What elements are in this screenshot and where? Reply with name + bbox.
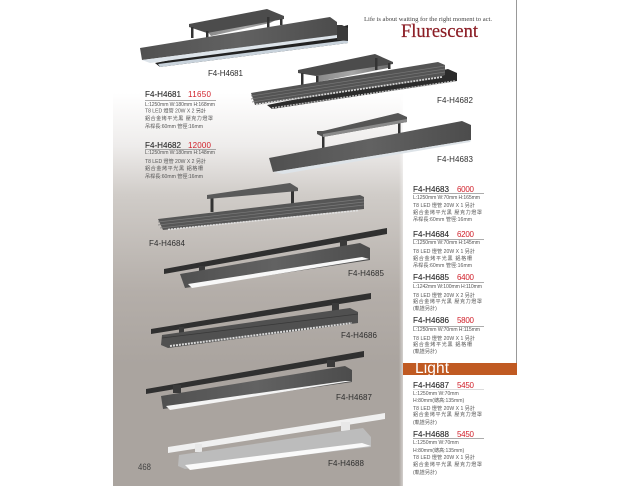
spec: F4-H4681: 吊桿長:60mm 管徑:16mm <box>145 123 203 130</box>
page background panel <box>113 0 403 486</box>
spec: F4-H4683: T8 LED 燈管 20W X 1 另計 <box>413 202 475 209</box>
spec: F4-H4684: L:1250mm W:70mm H:145mm <box>413 240 480 246</box>
spec: F4-H4687: H:80mm(總高:135mm) <box>413 397 465 404</box>
spec: F4-H4682: 12000 <box>188 141 212 150</box>
spec: F4-H4686: 5800 <box>457 316 475 325</box>
spec: F4-H4682 <box>145 141 216 180</box>
lamp F4-H4687 <box>146 351 364 410</box>
spec: F4-H4682: 鋁合金烤平光黑 鋁格柵 <box>145 165 203 172</box>
spec: F4-H4683: 6000 <box>457 185 475 194</box>
spec: F4-H4684: F4-H4684 <box>413 230 449 239</box>
spec: F4-H4688: (軌道另計) <box>413 469 437 476</box>
spec: F4-H4686: 鋁合金烤平光黑 鋁格柵 <box>413 341 472 348</box>
spec: F4-H4688: H:80mm(總高:135mm) <box>413 447 465 454</box>
spec: F4-H4684: 吊桿長:60mm 管徑:16mm <box>413 262 472 269</box>
spec: F4-H4687 <box>413 381 484 426</box>
spec: F4-H4685 <box>413 273 484 312</box>
spec: F4-H4687: T8 LED 燈管 20W X 1 另計 <box>413 405 475 412</box>
spec: F4-H4686: L:1250mm W:70mm H:115mm <box>413 327 480 333</box>
label F4-H4684: F4-H4684 <box>149 239 186 248</box>
spec: F4-H4688: L:1250mm W:70mm <box>413 440 459 446</box>
spec: F4-H4682: 吊桿長:60mm 管徑:16mm <box>145 173 203 180</box>
label F4-H4685: F4-H4685 <box>348 269 385 278</box>
title: Flurescent: Flurescent <box>401 22 479 42</box>
spec: F4-H4687: (軌道另計) <box>413 419 437 426</box>
label F4-H4686: F4-H4686 <box>341 331 378 340</box>
spec: F4-H4686: (軌道另計) <box>413 348 437 355</box>
spec: F4-H4685: 鋁合金烤平光黑 壓克力燈罩 <box>413 298 482 305</box>
spec: F4-H4688: 鋁合金烤平光黑 壓克力燈罩 <box>413 461 482 468</box>
lamp F4-H4684 <box>158 183 364 230</box>
spec: F4-H4684: 鋁合金烤平光黑 鋁格柵 <box>413 255 472 262</box>
lamp F4-H4685 <box>164 228 387 288</box>
section band: Light: Light <box>415 360 450 377</box>
lamp F4-H4682 <box>251 54 457 109</box>
spec: F4-H4685: F4-H4685 <box>413 273 449 282</box>
spec: F4-H4682: F4-H4682 <box>145 141 181 150</box>
spec: F4-H4687: L:1250mm W:70mm <box>413 391 459 397</box>
spec: F4-H4683: 吊桿長:60mm 管徑:16mm <box>413 216 472 223</box>
label F4-H4683: F4-H4683 <box>437 155 474 164</box>
spec: F4-H4686: T8 LED 燈管 20W X 1 另計 <box>413 335 475 342</box>
spec: F4-H4685: 6400 <box>457 273 475 282</box>
spec: F4-H4683: F4-H4683 <box>413 185 449 194</box>
right text panel <box>399 0 517 486</box>
lamp F4-H4686 <box>151 293 371 348</box>
spec: F4-H4684 <box>413 230 484 269</box>
spec: F4-H4688: T8 LED 燈管 20W X 1 另計 <box>413 454 475 461</box>
spec: F4-H4683 <box>413 185 484 223</box>
spec: F4-H4687: 鋁合金烤平光黑 壓克力燈罩 <box>413 411 482 418</box>
spec: F4-H4688: F4-H4688 <box>413 430 449 439</box>
spec: F4-H4685: (軌道另計) <box>413 305 437 312</box>
spec: F4-H4685: L:1242mm W:100mm H:110mm <box>413 284 482 290</box>
label F4-H4682: F4-H4682 <box>437 96 474 105</box>
label F4-H4688: F4-H4688 <box>328 459 365 468</box>
section band: Light <box>403 360 517 377</box>
spec: F4-H4687: 5450 <box>457 381 475 390</box>
lamp F4-H4688 <box>168 413 385 470</box>
spec: F4-H4682: T8 LED 燈管 20W X 2 另計 <box>145 158 206 165</box>
spec: F4-H4681: T8 LED 燈管 20W X 2 另計 <box>145 108 206 114</box>
spec: F4-H4685: T8 LED 燈管 20W X 2 另計 <box>413 292 475 299</box>
spec: F4-H4686: F4-H4686 <box>413 316 449 325</box>
label F4-H4681: F4-H4681 <box>208 69 244 78</box>
spec: F4-H4681: L:1250mm W:180mm H:168mm <box>145 102 215 108</box>
lamp F4-H4683 <box>269 113 471 174</box>
spec: F4-H4681 <box>145 90 216 130</box>
label F4-H4687: F4-H4687 <box>336 393 373 402</box>
spec: F4-H4682: L:1250mm W:180mm H:148mm <box>145 150 215 156</box>
spec: F4-H4684: 6200 <box>457 230 475 239</box>
spec: F4-H4688: 5450 <box>457 430 475 439</box>
spec: F4-H4687: F4-H4687 <box>413 381 449 390</box>
spec: F4-H4686 <box>413 316 484 355</box>
spec: F4-H4681: F4-H4681 <box>145 90 181 99</box>
lamp F4-H4681 <box>140 9 348 67</box>
spec: F4-H4688 <box>413 430 484 476</box>
spec: F4-H4681: 鋁合金烤平光黑 壓克力燈罩 <box>145 115 213 122</box>
spec: F4-H4683: L:1250mm W:70mm H:165mm <box>413 195 480 201</box>
spec: F4-H4683: 鋁合金烤平光黑 壓克力燈罩 <box>413 209 482 216</box>
spec: F4-H4681: 11650 <box>188 90 212 99</box>
tagline: Life is about waiting for the right moment to act. <box>364 16 492 23</box>
page number: 468 <box>138 462 151 473</box>
spec: F4-H4684: T8 LED 燈管 20W X 1 另計 <box>413 248 475 255</box>
